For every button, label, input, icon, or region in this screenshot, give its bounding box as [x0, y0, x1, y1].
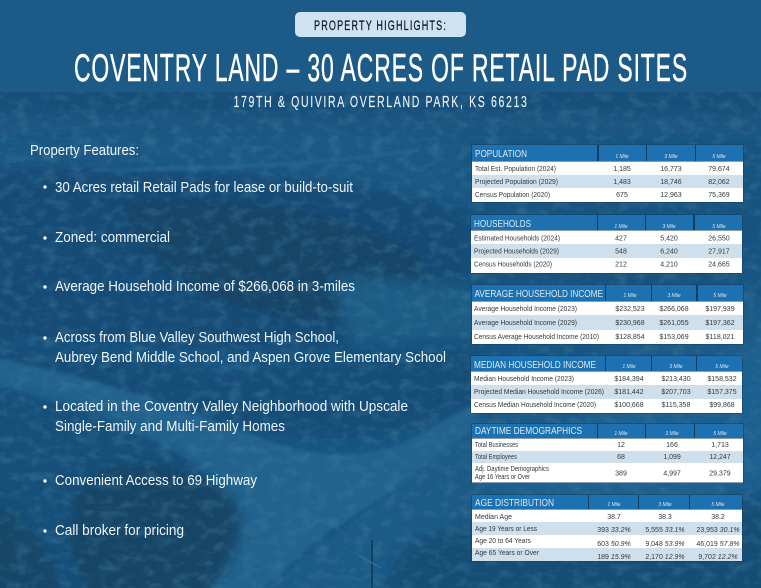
- table: average household income: 3 Mile: [667, 293, 681, 299]
- table: average household income: $230,968: [615, 320, 645, 327]
- table: average household income: 5 Mile: [713, 293, 727, 299]
- table: average household income: 1 Mile: [623, 293, 637, 299]
- table: households: 212: [615, 262, 627, 268]
- badge: property highlights: [295, 12, 466, 37]
- table: population: 1,185: [613, 166, 631, 173]
- table: age distribution: Median Age: [475, 514, 512, 521]
- table: average household income: $197,939: [705, 306, 735, 313]
- table: median household income: $213,430: [661, 376, 691, 383]
- table: households: 6,240: [660, 248, 678, 256]
- table: average household income: $118,021: [706, 334, 734, 341]
- table heading: daytime demographics: DAYTIME DEMOGRAPHICS: [475, 426, 582, 437]
- table: daytime demographics: 1,099: [663, 454, 681, 461]
- table: population: 75,369: [708, 192, 730, 199]
- table: average household income: $232,523: [615, 306, 645, 313]
- table: daytime demographics: Total Employees: [475, 454, 517, 461]
- table: daytime demographics: 1,713: [711, 442, 729, 449]
- table: age distribution: 1 Mile: [607, 502, 621, 508]
- table: age distribution: Age 20 to 64 Years: [475, 538, 531, 545]
- table: average household income: $266,068: [659, 306, 689, 313]
- table: age distribution: 5 Mile: [711, 502, 725, 508]
- table: age distribution: 46,019 57.8%: [696, 541, 740, 548]
- table: daytime demographics: 166: [666, 442, 678, 449]
- table: population: 18,746: [660, 179, 682, 186]
- bullet: pricing: Call broker for pricing: [55, 522, 184, 539]
- table: age distribution: [472, 494, 742, 562]
- table: age distribution: 38.3: [658, 514, 672, 521]
- panel: property features: [30, 142, 446, 539]
- table: median household income: $184,394: [614, 376, 644, 383]
- table heading: population: POPULATION: [475, 149, 527, 160]
- bullet: zoning: Zoned: commercial: [55, 229, 170, 246]
- bullet: neighborhood: Single-Family and Multi-Family Homes: [55, 418, 285, 435]
- table: population: Projected Population (2029): [475, 179, 558, 186]
- table heading: age distribution: AGE DISTRIBUTION: [475, 498, 554, 509]
- table: age distribution: 393 33.2%: [597, 527, 631, 534]
- table: population: 5 Mile: [712, 154, 726, 160]
- table: households: 3 Mile: [662, 224, 676, 230]
- table: average household income: $153,069: [659, 334, 689, 341]
- table: median household income: 1 Mile: [622, 364, 636, 370]
- table: households: Projected Households (2029): [474, 248, 559, 256]
- table heading: households: HOUSEHOLDS: [474, 219, 531, 230]
- table: age distribution: 9,048 53.9%: [645, 541, 685, 548]
- bullet: neighborhood: [43, 398, 408, 435]
- table: median household income: 5 Mile: [715, 364, 729, 370]
- table: average household income: Average Household Income (2029): [474, 320, 577, 327]
- subtitle: address: 179TH & QUIVIRA OVERLAND PARK, KS 66213: [234, 94, 528, 111]
- table: households: Estimated Households (2024): [474, 236, 560, 242]
- table heading: average household income: AVERAGE HOUSEHOLD INCOME: [474, 289, 603, 300]
- table: daytime demographics: 389: [615, 470, 627, 478]
- table: average household income: Average Household Income (2023): [474, 306, 577, 313]
- table: daytime demographics: 1 Mile: [614, 431, 628, 437]
- table: households: 548: [615, 248, 627, 256]
- table: median household income: Census Median Household Income (2020): [474, 402, 596, 409]
- table: median household income: $181,442: [614, 389, 644, 396]
- bullet: neighborhood: Located in the Coventry Valley Neighborhood with Upscale: [55, 398, 408, 415]
- table: population: 79,674: [708, 166, 730, 173]
- table: median household income: Projected Median Household Income (2026): [474, 389, 604, 396]
- table: households: 4,210: [660, 262, 678, 268]
- table: age distribution: 9,702 12.2%: [698, 554, 738, 561]
- bullet: household income: Average Household Income of $266,068 in 3-miles: [55, 278, 355, 295]
- table: median household income: $115,358: [662, 402, 690, 409]
- table: average household income: $128,854: [615, 334, 645, 341]
- table: median household income: $100,668: [614, 402, 644, 409]
- heading: property features: Property Features:: [30, 142, 139, 159]
- table: households: 5 Mile: [712, 224, 726, 230]
- table: daytime demographics: 5 Mile: [713, 431, 727, 437]
- bullet: highway access: Convenient Access to 69 Highway: [55, 472, 257, 489]
- table: age distribution: 38.7: [607, 514, 621, 521]
- bullet: schools: Aubrey Bend Middle School, and Aspen Grove Elementary School: [55, 349, 446, 366]
- table: age distribution: 189 15.9%: [597, 554, 631, 561]
- table: population: 12,963: [660, 192, 682, 199]
- table: population: 16,773: [660, 166, 682, 173]
- table: population: 675: [616, 192, 628, 199]
- table: households: 5,420: [660, 236, 678, 242]
- table: daytime demographics: Total Businesses: [475, 442, 518, 449]
- table: daytime demographics: 68: [617, 454, 625, 461]
- table: age distribution: Age 19 Years or Less: [475, 526, 537, 533]
- table: daytime demographics: 4,997: [663, 470, 681, 478]
- table: age distribution: 5,555 33.1%: [645, 527, 685, 534]
- table: median household income: Median Household Income (2023): [474, 376, 574, 383]
- table: daytime demographics: 29,379: [709, 470, 731, 478]
- table: population: 82,062: [708, 179, 730, 186]
- badge: property highlights: PROPERTY HIGHLIGHTS:: [314, 17, 447, 33]
- table: population: Census Population (2020): [475, 192, 550, 199]
- bullet: retail pads: 30 Acres retail Retail Pads for lease or build-to-suit: [55, 179, 354, 196]
- table: daytime demographics: 12,247: [709, 454, 731, 461]
- table: average household income: [472, 284, 744, 344]
- table: age distribution: 603 50.9%: [597, 541, 631, 548]
- table: households: 1 Mile: [614, 224, 628, 230]
- table: median household income: [470, 356, 742, 414]
- table: daytime demographics: Age 16 Years or Over: [475, 474, 531, 481]
- table: households: 24,665: [708, 262, 730, 268]
- table: median household income: $207,703: [661, 389, 691, 396]
- table: age distribution: 3 Mile: [658, 502, 672, 508]
- table: average household income: $197,362: [705, 320, 735, 327]
- table: population: 1,483: [613, 179, 631, 186]
- table: households: 27,917: [708, 248, 730, 256]
- table: age distribution: 38.2: [711, 514, 725, 521]
- table: population: Total Est. Population (2024): [475, 166, 556, 173]
- table: population: 1 Mile: [615, 154, 629, 160]
- table: median household income: $158,532: [707, 376, 737, 383]
- table heading: median household income: MEDIAN HOUSEHOLD INCOME: [474, 360, 596, 371]
- table: households: 427: [615, 236, 627, 242]
- table: households: Census Households (2020): [474, 262, 552, 268]
- bullet: schools: [43, 329, 446, 366]
- table: daytime demographics: [472, 424, 744, 483]
- table: age distribution: Age 65 Years or Over: [475, 550, 540, 557]
- bullet: schools: Across from Blue Valley Southwest High School,: [55, 329, 339, 346]
- table: households: [470, 214, 742, 274]
- table: population: 3 Mile: [664, 154, 678, 160]
- table: median household income: $99,868: [709, 402, 735, 409]
- table: age distribution: 2,170 12.9%: [645, 554, 685, 561]
- table: daytime demographics: Adj. Daytime Demographics: [475, 466, 549, 473]
- table: median household income: $157,375: [707, 389, 737, 396]
- table: average household income: $261,055: [659, 320, 689, 327]
- table: average household income: Census Average Household Income (2010): [474, 334, 599, 341]
- table: median household income: 3 Mile: [669, 364, 683, 370]
- table: daytime demographics: 12: [617, 442, 625, 449]
- table: age distribution: 23,953 30.1%: [696, 527, 740, 534]
- table: households: 26,550: [708, 236, 730, 242]
- table: daytime demographics: 3 Mile: [665, 431, 679, 437]
- table: population: [472, 144, 744, 202]
